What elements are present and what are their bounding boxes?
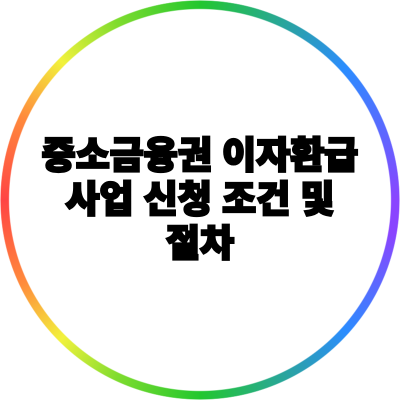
title: 중소금융권 이자환급: [42, 135, 358, 176]
title: 절차: [166, 223, 234, 264]
title: [42, 135, 358, 264]
title: 사업 신청 조건 및: [65, 179, 335, 220]
